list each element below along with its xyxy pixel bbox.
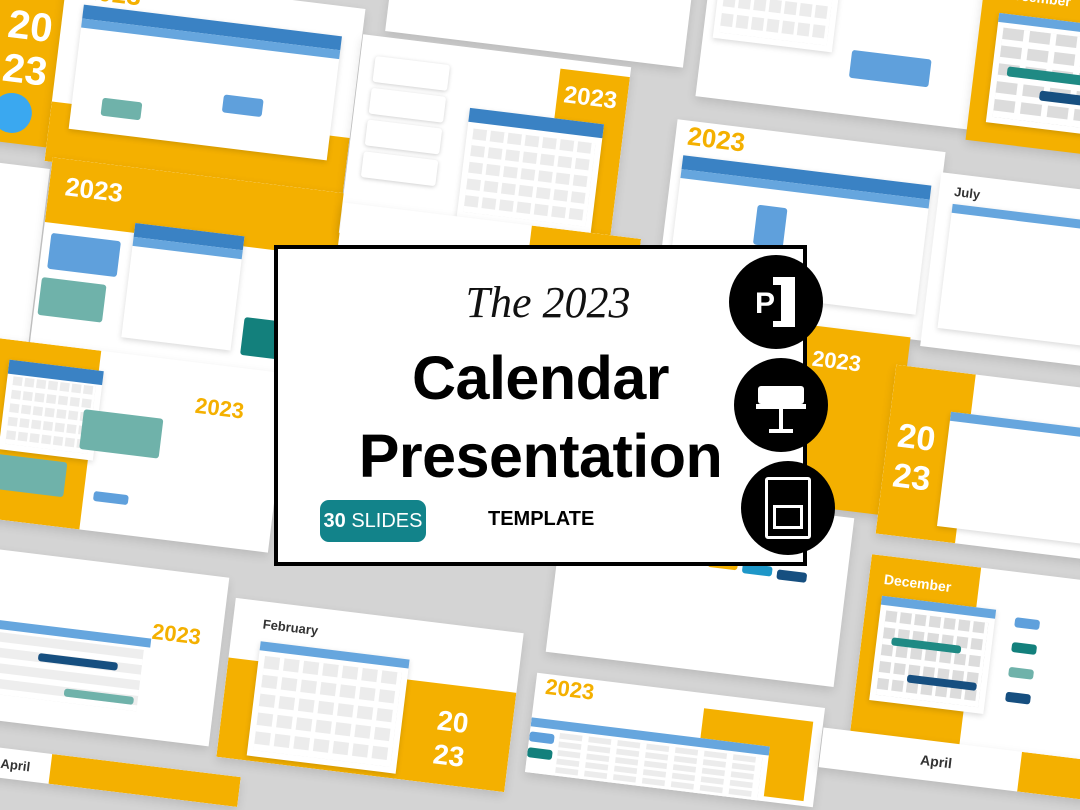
slide: yellow 2023 top-left: 20 bbox=[6, 2, 55, 51]
slide: February: 23 bbox=[431, 738, 466, 773]
heading: Calendar Presentation: Calendar bbox=[412, 344, 669, 412]
slide: timeline bbox=[546, 483, 854, 687]
slide: July right bbox=[920, 172, 1080, 373]
slide: February: February bbox=[262, 616, 319, 638]
slide: December dates: December bbox=[883, 571, 952, 595]
icon: Keynote bbox=[734, 358, 828, 452]
slide: December event bbox=[695, 0, 1015, 133]
slide: July event bbox=[339, 34, 631, 266]
slide: weeks 2023: 2023 bbox=[544, 674, 596, 705]
slide: March: 2023 bbox=[194, 393, 245, 424]
badge: 30 slides: 30 SLIDES bbox=[324, 510, 422, 532]
slide: behind center bbox=[319, 202, 641, 438]
slide: yellow 2023 top-left bbox=[0, 0, 70, 148]
slide: August event bbox=[654, 119, 946, 341]
slide: August calendar bbox=[45, 0, 365, 198]
heading: Calendar Presentation bbox=[359, 344, 722, 490]
slide: June: 23 bbox=[891, 456, 933, 499]
slide: June: 20 bbox=[895, 417, 938, 459]
slide: April right bbox=[819, 727, 1080, 803]
slide: February: 20 bbox=[436, 705, 470, 739]
slide: April left: April bbox=[0, 756, 31, 774]
slide: August event: 2023 bbox=[686, 121, 747, 158]
slide: 2023 white bottom-left bbox=[0, 544, 229, 746]
slide: December dates bbox=[850, 554, 1080, 766]
slide: October bbox=[30, 157, 350, 383]
icon: PowerPoint bbox=[729, 255, 823, 349]
title box bbox=[274, 245, 807, 566]
slide: June: June bbox=[976, 395, 1011, 415]
slide: October: 2023 bbox=[63, 171, 125, 208]
slide: April right: April bbox=[919, 752, 953, 771]
icon: PowerPoint: P bbox=[755, 287, 775, 320]
slide: June bbox=[876, 365, 1080, 565]
slide: 2023 white bottom-left: 2023 bbox=[151, 619, 202, 650]
slide: March bbox=[0, 337, 290, 553]
heading: Calendar Presentation: Presentation bbox=[359, 422, 722, 490]
slide: left white bbox=[0, 132, 50, 348]
label: template: TEMPLATE bbox=[488, 508, 594, 530]
slide: 2023 mid right: 2023 bbox=[811, 346, 862, 376]
slide: April left bbox=[0, 743, 241, 807]
slide: July event: 2023 bbox=[562, 81, 619, 115]
badge: 30 slides bbox=[320, 500, 426, 542]
slide: July right: July bbox=[953, 184, 981, 202]
subtitle: The 2023: The 2023 bbox=[466, 278, 630, 327]
slide: February bbox=[216, 598, 524, 792]
icon: Google Slides bbox=[741, 461, 835, 555]
slide: yellow 2023 top-left: 23 bbox=[0, 46, 50, 95]
slide: weeks 2023 bbox=[525, 673, 825, 807]
slide: top center bbox=[385, 0, 705, 68]
slide: 2023 mid right bbox=[779, 324, 911, 516]
slide: December yellow bbox=[966, 0, 1080, 169]
